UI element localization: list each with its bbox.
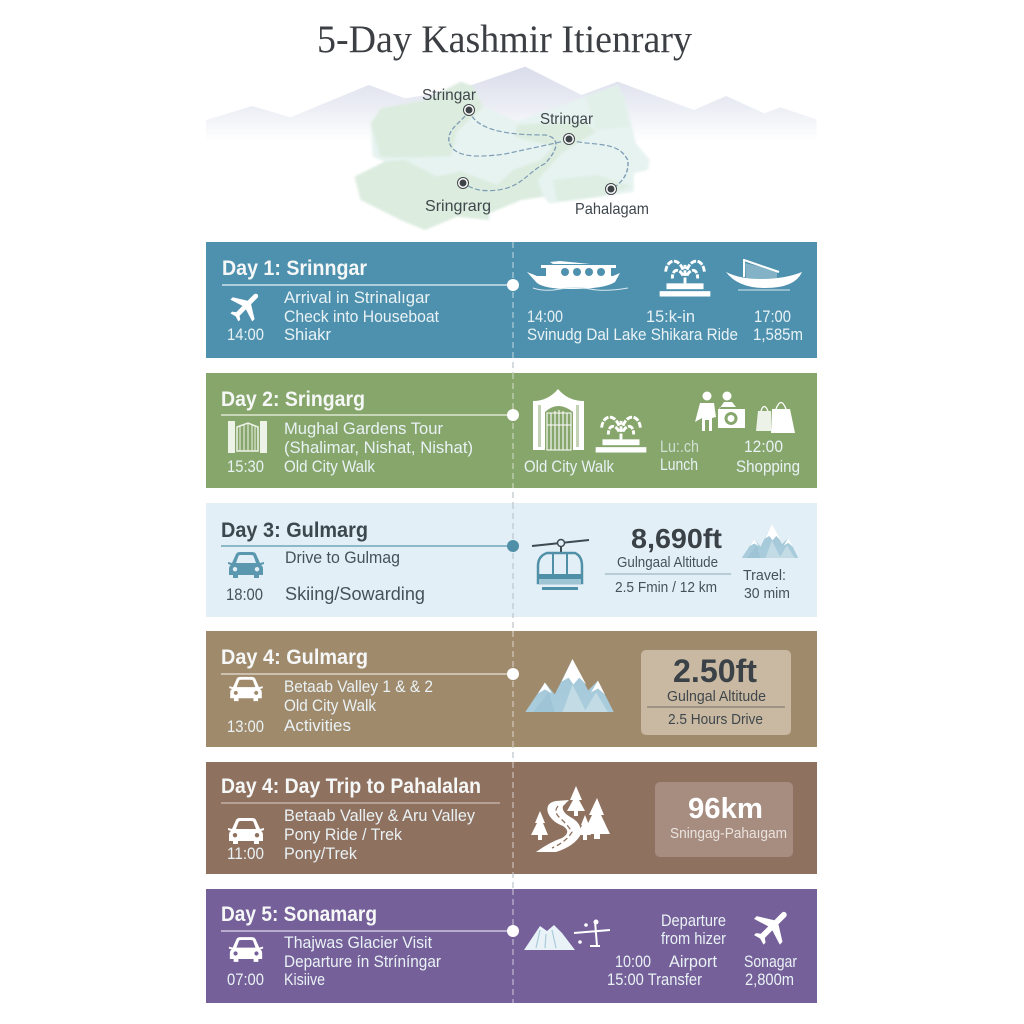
icon: plane <box>746 900 799 953</box>
day 2 schedule: Lunch <box>660 456 698 474</box>
icon: houseboat <box>527 261 628 290</box>
day 1 activities <box>284 289 439 344</box>
day 5 timeline marker <box>221 925 519 937</box>
day 1 activities: Check into Houseboat <box>284 308 439 326</box>
day 3 travel time: Travel: <box>743 567 786 584</box>
day 5 activities: Kisiive <box>284 971 325 989</box>
icon: skier <box>574 920 610 946</box>
day 5 activities: Thajwas Glacier Visit <box>284 934 432 952</box>
day 4 altitude card: 2.5 Hours Drive <box>668 711 763 728</box>
panel: day 3 <box>206 503 817 617</box>
icon: car <box>229 677 263 701</box>
route lines <box>449 111 628 191</box>
day 3 travel time <box>743 567 790 602</box>
mountain backdrop <box>206 67 816 142</box>
icon: tourists with camera <box>695 392 745 431</box>
day 4 altitude card: Gulngal Altitude <box>667 688 766 705</box>
day 1 schedule: 1,585m <box>753 326 803 344</box>
day 3 travel time: 30 mim <box>744 585 790 602</box>
day 2 activities <box>284 420 473 476</box>
day 4 activities: Activities <box>284 717 351 735</box>
distance card <box>655 782 793 857</box>
day 2 schedule: Shopping <box>736 458 800 476</box>
panel: day 5 <box>206 889 817 1003</box>
day 1 schedule: 14:00 <box>527 308 563 326</box>
icon: car <box>229 937 263 962</box>
day 4 timeline marker <box>221 668 519 680</box>
icon: shikara boat <box>726 259 802 290</box>
icon: mountains <box>742 524 798 558</box>
day 2 schedule: Lu:.ch <box>660 438 699 456</box>
day 1 heading: Day 1: Srinngar <box>222 256 368 280</box>
day 3 altitude stat: Gulngaal Altitude <box>617 554 718 571</box>
day 1 time: 14:00 <box>227 326 264 344</box>
day 2 activities: (Shalimar, Nishat, Nishat) <box>284 439 473 457</box>
distance card: 96km <box>688 793 763 825</box>
day 1 schedule: 17:00 <box>754 308 791 326</box>
icon: fountain <box>660 261 710 297</box>
icon: small garden gate <box>228 421 267 453</box>
day 5 destination: Sonagar <box>744 953 797 971</box>
day 5 schedule: Departure <box>661 912 726 930</box>
panel: day 2 <box>206 373 817 488</box>
day trip heading: Day 4: Day Trip to Pahalalan <box>221 774 481 798</box>
day 2 schedule: 12:00 <box>744 438 783 456</box>
title: 5-Day Kashmir Itienrary <box>317 18 692 61</box>
map illustration <box>206 67 816 230</box>
day 2 timeline marker <box>221 409 519 421</box>
map labels <box>422 87 649 218</box>
day 1 schedule: Svinudg Dal Lake Shikara Ride <box>527 326 738 344</box>
map labels: Stringar <box>422 87 477 104</box>
timeline spine <box>512 242 514 1003</box>
icon: winding road and pines <box>531 786 610 852</box>
day 5 destination: 2,800m <box>745 971 794 989</box>
day 3 altitude stat: 8,690ft <box>631 523 722 554</box>
day 5 schedule: Airport <box>669 953 717 971</box>
day 2 time: 15:30 <box>227 458 264 476</box>
day 3 altitude stat: 2.5 Fmin / 12 km <box>615 579 717 596</box>
icon: car <box>228 552 264 578</box>
day 3 activities: Skiing/Sowarding <box>285 583 425 604</box>
day 4 activities: Betaab Valley 1 & & 2 <box>284 678 433 696</box>
icon: plane <box>224 284 268 328</box>
day 3 activities: Drive to Gulmag <box>285 549 400 567</box>
day 4 heading: Day 4: Gulmarg <box>221 645 368 669</box>
day 4 altitude card: 2.50ft <box>673 653 757 689</box>
icon: cable car <box>532 540 589 590</box>
day 5 schedule <box>607 912 726 989</box>
day 2 schedule: Old City Walk <box>524 458 615 476</box>
day 2 activities: Old City Walk <box>284 458 376 476</box>
day 4 time: 13:00 <box>227 718 264 736</box>
day trip time: 11:00 <box>227 845 264 863</box>
day 1 schedule: 15:k-in <box>646 308 695 326</box>
day 4 activities <box>284 678 433 735</box>
day 3 timeline marker <box>221 540 519 552</box>
day 5 heading: Day 5: Sonamarg <box>221 902 377 926</box>
icon: garden fountain <box>596 417 646 453</box>
day trip activities <box>284 807 476 863</box>
map regions <box>355 82 650 230</box>
day 5 activities: Departure ín Stríníngar <box>284 953 441 971</box>
panel: day 4 trip <box>206 762 817 874</box>
day 3 activities <box>285 549 425 604</box>
day trip activities: Betaab Valley & Aru Valley <box>284 807 476 825</box>
day 2 activities: Mughal Gardens Tour <box>284 420 444 438</box>
day 4 activities: Old City Walk <box>284 697 377 715</box>
distance card: Sningag-Pahaıgam <box>670 825 787 842</box>
day 5 schedule: 10:00 <box>615 953 651 971</box>
map labels: Sringrarg <box>425 198 491 215</box>
map labels: Pahalagam <box>575 201 649 218</box>
day 5 destination <box>744 953 797 989</box>
day 5 activities <box>284 934 441 989</box>
day 5 time: 07:00 <box>227 971 264 989</box>
icon: garden gate <box>533 389 584 450</box>
panel: day 4 <box>206 631 817 747</box>
day 2 heading: Day 2: Sringarg <box>221 387 365 411</box>
icon: glacier <box>524 925 575 950</box>
day 4 altitude card <box>641 650 791 735</box>
icon: car <box>228 818 264 844</box>
day 3 heading: Day 3: Gulmarg <box>221 518 368 542</box>
day 1 timeline marker <box>222 279 519 291</box>
day 3 altitude stat <box>605 523 731 596</box>
day 5 schedule: from hizer <box>661 930 726 948</box>
day 5 schedule: 15:00 Transfer <box>607 971 702 989</box>
map labels: Stringar <box>540 111 594 128</box>
day 1 activities: Arrival in Strinalıgar <box>284 289 431 307</box>
day trip divider <box>221 802 500 804</box>
day 2 schedule <box>524 438 800 476</box>
day 3 time: 18:00 <box>226 586 263 604</box>
icon: snowy mountains <box>525 659 614 712</box>
icon: shopping bags <box>756 402 795 433</box>
day 1 schedule <box>527 308 803 344</box>
day 1 activities: Shiakr <box>284 326 331 344</box>
day trip activities: Pony Ride / Trek <box>284 826 403 844</box>
day trip activities: Pony/Trek <box>284 845 358 863</box>
map pins <box>458 104 616 194</box>
panel: day 1 <box>206 242 817 358</box>
